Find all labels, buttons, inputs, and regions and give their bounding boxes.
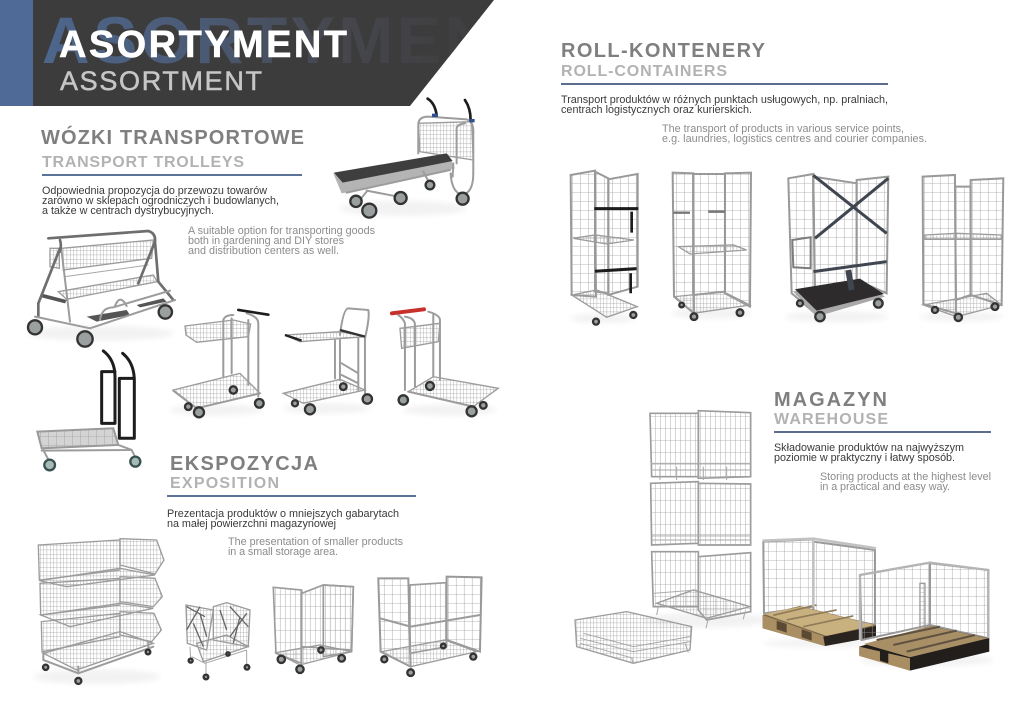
- icon: cart with red handle: [392, 309, 498, 416]
- icon: black-framed platform trolley: [37, 351, 140, 470]
- panel: transport trolleys text: Odpowiednia propozycja do przewozu towarów: [42, 185, 267, 197]
- panel: warehouse text: poziomie w praktyczny i łatwy sposób.: [774, 452, 955, 464]
- panel: warehouse text: in a practical and easy way.: [820, 481, 950, 493]
- panel: exposition text: in a small storage area.: [228, 546, 338, 558]
- icon: A-frame shelf trolley: [27, 231, 175, 347]
- title: ASORTYMENT: [59, 24, 347, 66]
- icon: three-tier stacking baskets: [33, 539, 164, 684]
- icon: wire cage on wooden pallet: [763, 539, 877, 647]
- panel: exposition text: EKSPOZYCJA: [170, 453, 318, 475]
- icon: roll container with central shelf: [920, 175, 1003, 321]
- panel: transport trolleys text: and distribution centers as well.: [188, 245, 339, 257]
- panel: roll-containers text: e.g. laundries, logistics centres and courier companies.: [662, 133, 927, 145]
- icon: medium wire cage: [273, 585, 353, 673]
- icon: cart with black handle and basket: [170, 310, 268, 417]
- icon: large wire cage: [378, 577, 482, 676]
- panel: exposition text: EXPOSITION: [170, 475, 279, 492]
- panel: transport trolleys text: A suitable option for transporting goods: [188, 225, 376, 237]
- panel: warehouse text: WAREHOUSE: [774, 411, 888, 428]
- icon: stacked wire pallet cages: [575, 411, 770, 664]
- panel: exposition text: Prezentacja produktów o mniejszych gabarytach: [167, 508, 399, 520]
- icon: open wire cage on dark pallet: [859, 563, 993, 671]
- icon: flat-bed trolley with black deck: [333, 99, 475, 218]
- icon: roll container with black straps: [570, 171, 638, 325]
- panel: roll-containers text: ROLL-CONTAINERS: [561, 63, 727, 80]
- panel: roll-containers text: centrach logistycznych oraz kurierskich.: [561, 104, 752, 116]
- icon: roll container with black deck and X straps: [785, 174, 888, 322]
- panel: roll-containers text: Transport produktów w różnych punktach usługowych, np. pralniach,: [561, 94, 888, 106]
- panel: roll-containers text: ROLL-KONTENERY: [561, 40, 766, 62]
- panel: exposition text: The presentation of smaller products: [228, 536, 404, 548]
- icon: cart with flat top shelf: [283, 308, 372, 414]
- subtitle: ASSORTMENT: [60, 66, 262, 96]
- panel: warehouse text: [774, 389, 991, 493]
- panel: exposition text: [167, 453, 416, 558]
- panel: warehouse text: Składowanie produktów na najwyższym: [774, 442, 964, 454]
- panel: warehouse text: MAGAZYN: [774, 389, 887, 411]
- panel: transport trolleys text: TRANSPORT TROLLEYS: [42, 154, 244, 171]
- panel: roll-containers text: [561, 40, 927, 145]
- panel: transport trolleys text: a także w centrach dystrybucyjnych.: [42, 205, 214, 217]
- panel: transport trolleys text: both in gardening and DIY stores: [188, 235, 345, 247]
- panel: transport trolleys text: WÓZKI TRANSPORTOWE: [41, 125, 304, 149]
- panel: exposition text: na małej powierzchni magazynowej: [167, 518, 336, 530]
- icon: roll container with shelf: [672, 173, 752, 320]
- icon: small wire bin: [186, 603, 250, 679]
- panel: roll-containers text: The transport of products in various service points,: [662, 123, 904, 135]
- header banner: [0, 0, 536, 106]
- icon: collapsed flat cage: [575, 612, 692, 664]
- header banner: ASORTYMENT: [42, 3, 536, 77]
- panel: warehouse text: Storing products at the highest level: [820, 471, 991, 483]
- panel: transport trolleys text: zarówno w sklepach ogrodniczych i budowlanych,: [42, 195, 279, 207]
- panel: transport trolleys text: [41, 125, 376, 257]
